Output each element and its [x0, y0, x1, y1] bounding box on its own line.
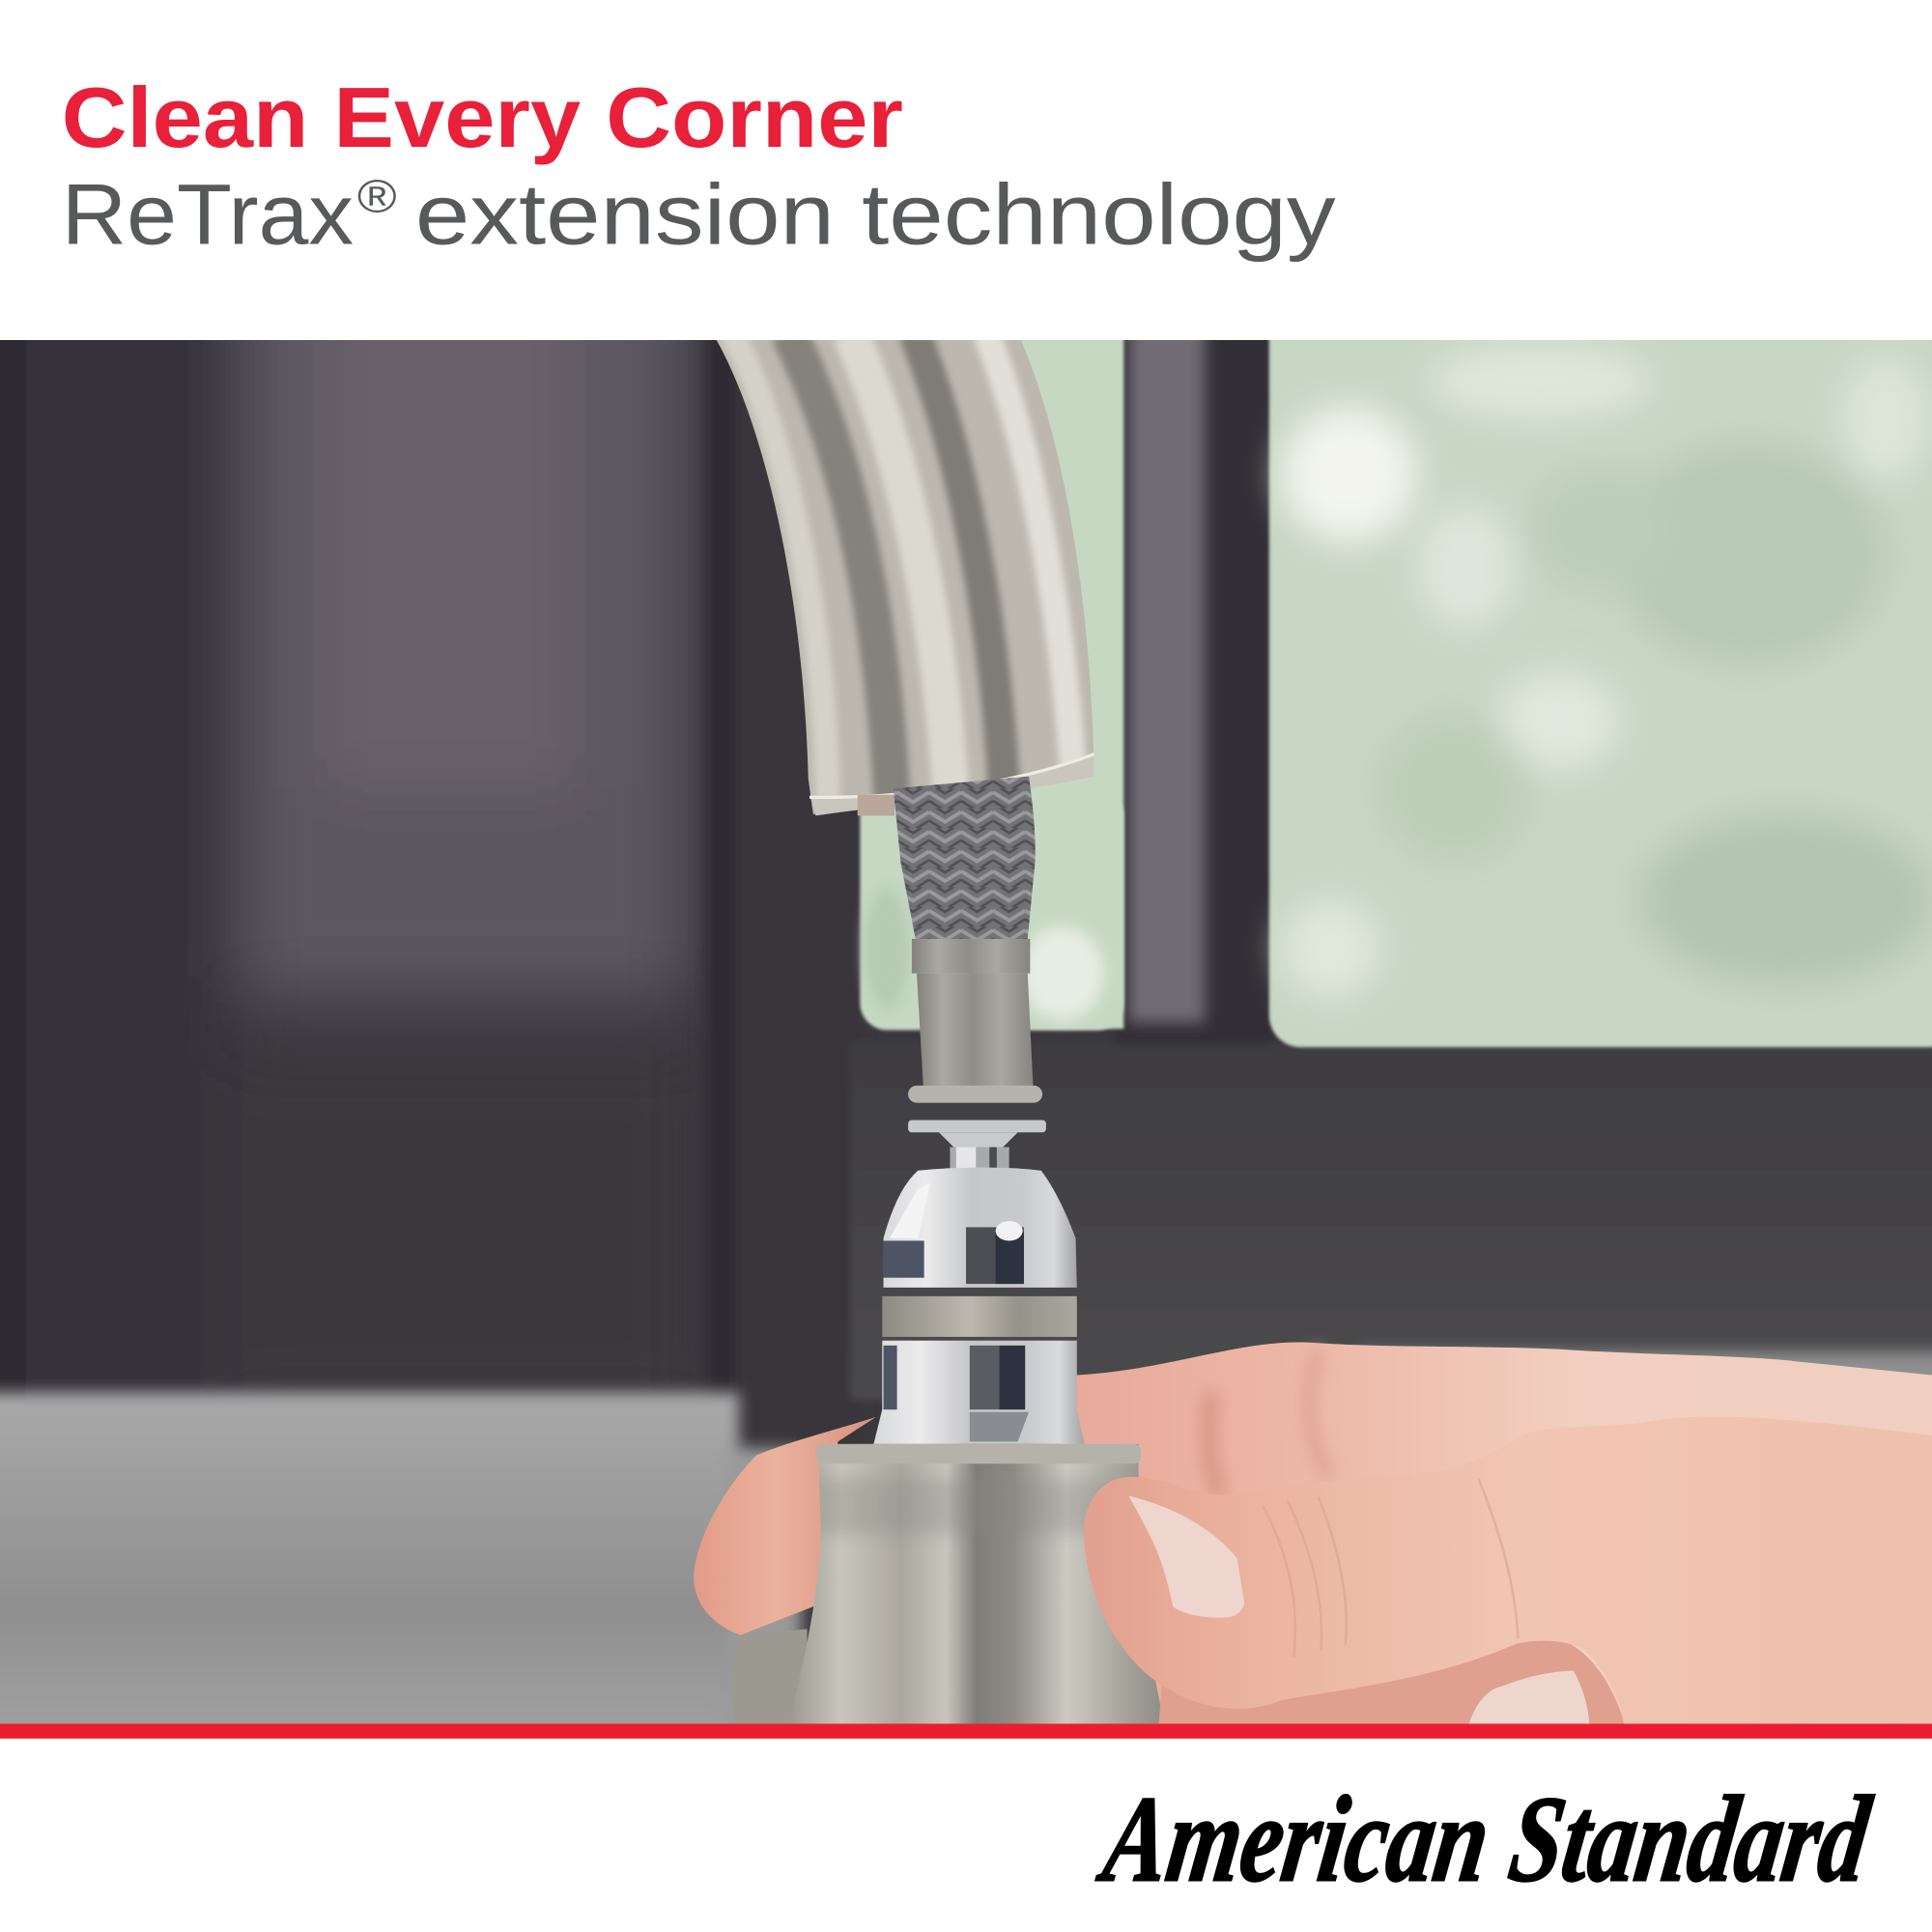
window frame — [1115, 296, 1275, 1042]
subtitle: ® — [357, 170, 397, 222]
faucet spout — [712, 332, 1094, 815]
hose collar fitting — [908, 939, 1046, 1132]
title: Clean Every Corner — [62, 70, 903, 165]
photo background: dark cabinet and window — [0, 246, 1932, 1775]
sprayer lever button — [733, 1629, 807, 1725]
chrome lower collar — [873, 1341, 1084, 1444]
brushed ring — [882, 1296, 1077, 1337]
red divider band — [0, 1723, 1932, 1739]
photo: faucet sprayer held in hand — [0, 246, 1932, 1775]
left finger behind sprayer — [694, 1417, 876, 1635]
lower wall — [850, 1042, 1932, 1400]
narrow window — [860, 283, 1123, 1030]
counter top — [0, 1351, 1932, 1749]
subtitle — [62, 166, 1336, 263]
hand: back of fingers — [1060, 1343, 1932, 1725]
chrome neck — [939, 1132, 1018, 1172]
cabinet panel — [187, 340, 699, 1039]
icon: dome spray hole — [996, 1221, 1023, 1240]
chrome sprayer head dome — [884, 1168, 1077, 1288]
lower finger and nail — [1159, 1640, 1624, 1723]
main window — [1269, 271, 1932, 1047]
subtitle: ReTrax — [62, 166, 354, 263]
hand: palm and thumb — [1084, 1417, 1932, 1725]
thumb nail — [1128, 1495, 1244, 1618]
subtitle: extension technology — [415, 166, 1336, 263]
thumb wrinkles — [1263, 1479, 1518, 1658]
braided hose — [894, 777, 1036, 939]
sprayer base — [788, 1444, 1164, 1725]
